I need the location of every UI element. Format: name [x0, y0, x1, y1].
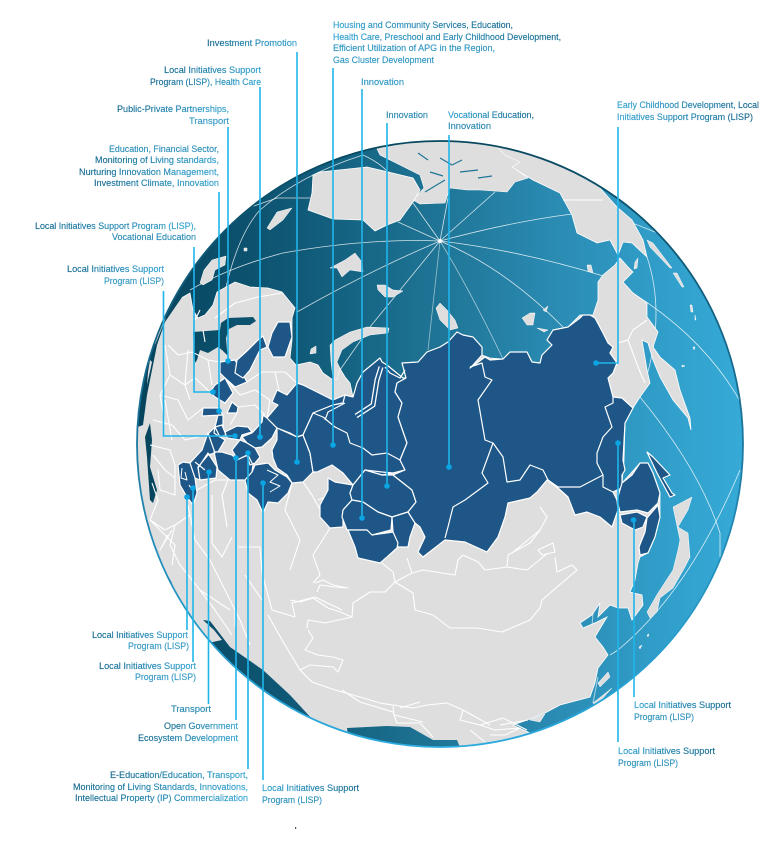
Gulf of Ob — [356, 367, 381, 416]
callout: PPP, Transport: Public-Private Partnerships, — [117, 103, 229, 114]
Atlantic chunk — [145, 423, 157, 503]
region: Karelia side — [235, 336, 267, 378]
callout: LISP south 1: Local Initiatives Support — [92, 629, 188, 640]
callout: Investment Promotion — [207, 37, 300, 465]
callout: Investment Promotion: Investment Promotion — [207, 37, 297, 48]
Arctic channels — [418, 153, 492, 192]
callout: LISP south 3: Program (LISP) — [262, 794, 322, 805]
callout: PPP, Transport: Transport — [189, 115, 229, 126]
grey-land borders — [150, 200, 647, 742]
islands — [200, 208, 696, 722]
callout: LISP Far East 2 — [615, 440, 715, 768]
ocean sphere — [137, 141, 743, 747]
callout: LISP west — [67, 263, 238, 439]
callout: LISP west: Program (LISP) — [104, 275, 164, 286]
callout: LISP, Vocational Education: Vocational Education — [112, 231, 196, 242]
Bay of Bengal — [347, 726, 460, 746]
callout: LISP, Health Care — [150, 64, 263, 440]
callout: Innovation 2: Innovation — [386, 109, 428, 120]
globe — [100, 130, 745, 760]
callout: E-Education: Intellectual Property (IP) Commercialization — [75, 792, 248, 803]
region: central Russia — [207, 415, 277, 452]
land masses — [138, 142, 696, 746]
Russian regions — [178, 315, 675, 563]
land: Arctic archipelago — [376, 142, 529, 204]
land: Alaska — [498, 147, 648, 258]
callout: Vocational Education, Innovation: Vocational Education, — [448, 109, 534, 120]
Atlantic sliver — [138, 297, 182, 427]
callout: Early Childhood Development: Early Childhood Development, Local — [617, 99, 759, 110]
callout: LISP south 1: Program (LISP) — [128, 640, 189, 651]
callout: Open Government: Ecosystem Development — [138, 732, 238, 743]
callout: Education, Financial Sector: Investment Climate, Innovation — [94, 177, 219, 188]
callout: Innovation 2 — [384, 109, 428, 489]
callout: LISP south 2: Program (LISP) — [135, 671, 196, 682]
callout: LISP Far East 1 — [631, 517, 731, 722]
callout: LISP south 1 — [92, 494, 190, 651]
callout: E-Education: Monitoring of Living Standards, Innovations, — [73, 781, 248, 792]
callout: Housing and Community Services: Efficient Utilization of APG in the Region, — [333, 42, 495, 53]
callout: E-Education: E-Education/Education, Transport, — [110, 769, 248, 780]
region: Sakhalin strip — [647, 452, 675, 497]
callout: Vocational Education, Innovation: Innovation — [448, 120, 491, 131]
region: Arkhangelsk — [268, 322, 292, 357]
region: Altai — [348, 530, 398, 563]
callout: Vocational Education, Innovation — [446, 109, 534, 470]
land: Greenland — [308, 167, 420, 231]
region: Far East coast — [617, 463, 660, 513]
Red Sea strip — [167, 574, 172, 583]
callout: Education, Financial Sector: Nurturing Innovation Management, — [79, 166, 219, 177]
callout: LISP south 3 — [260, 480, 359, 805]
callout: Education, Financial Sector: Education, Financial Sector, — [109, 143, 219, 154]
region: Volga block — [190, 433, 292, 513]
callout: LISP, Vocational Education: Local Initiatives Support Program (LISP), — [35, 220, 196, 231]
region: Western Siberia — [303, 358, 407, 485]
region: Jewish AO — [620, 512, 647, 530]
region: Komi — [267, 383, 345, 437]
region: Omsk — [350, 470, 416, 517]
region: Tomsk — [392, 512, 415, 547]
callout: Housing and Community Services: Housing and Community Services, Education, — [333, 19, 513, 30]
Baltic Sea — [193, 317, 256, 363]
region: European chain — [202, 360, 247, 427]
region: Kurgan — [320, 478, 353, 528]
callout: LISP south 2 — [99, 485, 196, 682]
callout: Open Government: Open Government — [164, 720, 238, 731]
land: Eurasia — [100, 258, 691, 760]
callout: Early Childhood Development: Initiatives Support Program (LISP) — [617, 111, 753, 122]
region: Novosibirsk — [342, 500, 392, 535]
callout: LISP, Vocational Education — [35, 220, 216, 395]
callout: LISP Far East 2: Program (LISP) — [618, 757, 678, 768]
callout: LISP Far East 2: Local Initiatives Support — [618, 745, 715, 756]
callout: LISP south 2: Local Initiatives Support — [99, 660, 196, 671]
callout: LISP west: Local Initiatives Support — [67, 263, 164, 274]
callout: LISP Far East 1: Program (LISP) — [634, 711, 694, 722]
callout: Education, Financial Sector: Monitoring of Living standards, — [95, 154, 219, 165]
region inner borders — [181, 363, 613, 538]
region: Eastern Siberia — [393, 315, 633, 557]
callout: LISP Far East 1: Local Initiatives Support — [634, 699, 731, 710]
callout: Transport — [171, 469, 212, 714]
callout: Open Government — [138, 455, 239, 743]
Arabian Sea — [203, 620, 313, 725]
callout: Innovation 1 — [359, 76, 404, 521]
callout: Housing and Community Services — [330, 19, 561, 448]
callout: Early Childhood Development — [593, 99, 759, 366]
globe rim — [137, 141, 743, 747]
small footer mark — [295, 827, 296, 829]
region: Caucasus — [178, 462, 197, 505]
callout: E-Education — [73, 450, 251, 803]
callout: LISP, Health Care: Program (LISP), Health Care — [150, 76, 261, 87]
callout: Housing and Community Services: Health Care, Preschool and Early Childhood Development, — [333, 31, 561, 42]
callout: LISP, Health Care: Local Initiatives Support — [164, 64, 261, 75]
callout: PPP, Transport — [117, 103, 231, 364]
region: Orenburg — [272, 428, 313, 483]
pole marker — [438, 239, 442, 243]
callout: Innovation 1: Innovation — [361, 76, 404, 87]
Atlantic slivers grey strip — [147, 317, 166, 385]
callout: Education, Financial Sector — [79, 143, 222, 414]
callout: LISP south 3: Local Initiatives Support — [262, 782, 359, 793]
graticule lines — [190, 155, 745, 746]
region: Primorye — [639, 505, 660, 555]
callout: Housing and Community Services: Gas Cluster Development — [333, 54, 434, 65]
callout: Transport: Transport — [171, 703, 211, 714]
